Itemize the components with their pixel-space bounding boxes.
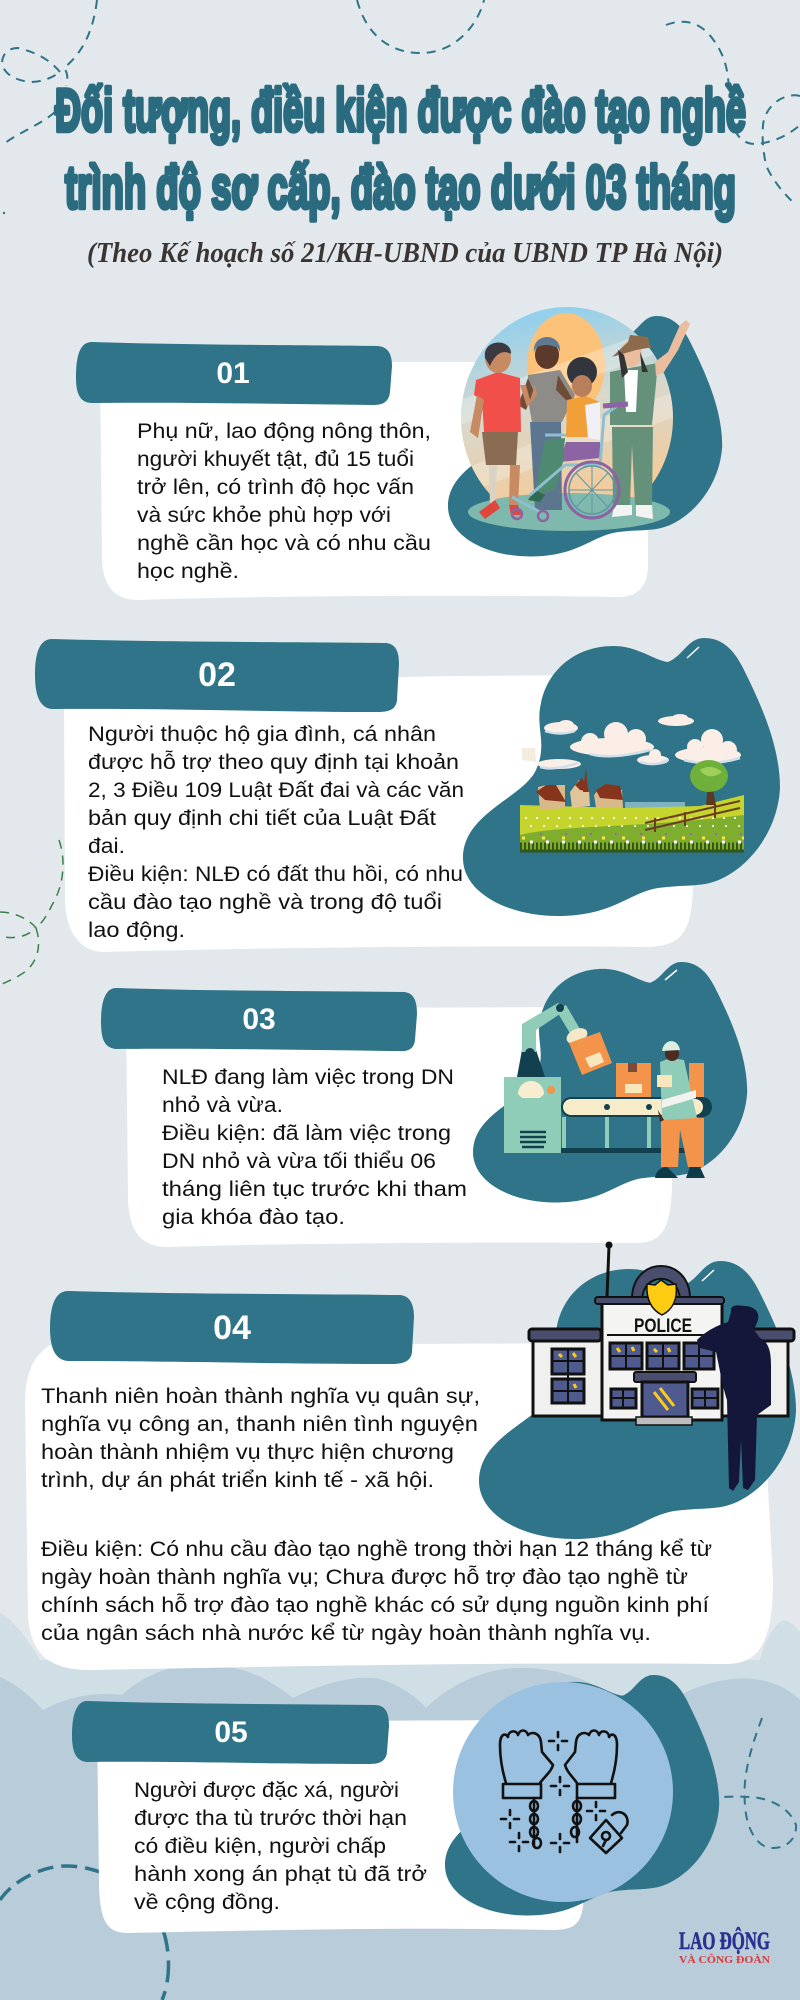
text 02: Điều kiện: NLĐ có đất thu hồi, có nhu [88,863,463,886]
text 04: Điều kiện: Có nhu cầu đào tạo nghề trong thời hạn 12 tháng kể từ [41,1538,712,1561]
text 05: về cộng đồng. [134,1891,280,1914]
text 03: Điều kiện: đã làm việc trong [162,1122,451,1145]
header 03 [101,988,417,1051]
text 05: được tha tù trước thời hạn [134,1807,407,1830]
illustration: police station [529,1242,794,1491]
panel: 03 [101,962,747,1247]
icon: handcuffed hands with lock [500,1730,628,1853]
number 05: 05 [214,1716,248,1749]
text 02: bản quy định chi tiết của Luật Đất [88,807,436,830]
field [625,802,685,809]
card 03 [126,1007,672,1247]
illustration: factory [504,1003,712,1178]
text 01: Phụ nữ, lao động nông thôn, [137,420,431,443]
text 02: cầu đào tạo nghề và trong độ tuổi [88,891,442,914]
title [55,77,746,221]
card 04 [25,1343,773,1670]
header 01 [76,342,392,405]
number 02: 02 [198,656,236,694]
number 03: 03 [242,1003,276,1036]
text 03 [162,1066,467,1229]
clouds [537,714,741,769]
text 04: của ngân sách nhà nước kể từ ngày hoàn thành nghĩa vụ. [41,1622,651,1645]
text 03: gia khóa đào tạo. [162,1206,345,1229]
text 02: đai. [88,835,125,858]
text 01: học nghề. [137,560,239,583]
logo: Lao Động và Công Đoàn: VÀ CÔNG ĐOÀN [679,1953,770,1966]
text 02: 2, 3 Điều 109 Luật Đất đai và các văn [88,779,464,802]
header 04 [50,1291,414,1364]
person in wheelchair [566,396,600,437]
blob 02 [463,638,780,916]
subtitle: (Theo Kế hoạch số 21/KH-UBND của UBND TP Hà Nội) [87,237,723,269]
text 03: nhỏ và vừa. [162,1094,283,1117]
text 03: NLĐ đang làm việc trong DN [162,1066,454,1089]
text 04: nghĩa vụ công an, thanh niên tình nguyện [41,1413,478,1436]
saluting officer [697,1305,771,1491]
text 01: trở lên, có trình độ học vấn [137,476,414,499]
circle [453,1682,673,1902]
blob 05 [445,1675,719,1915]
number 01: 01 [216,357,250,390]
person grey [528,370,575,422]
text 01: và sức khỏe phù hợp với [137,504,391,527]
text 03: tháng liên tục trước khi tham [162,1178,467,1201]
door [634,1372,696,1382]
illustration: countryside [520,714,744,851]
illustration: police station: POLICE [634,1316,692,1337]
text 04: Thanh niên hoàn thành nghĩa vụ quân sự, [41,1385,480,1408]
text 01: người khuyết tật, đủ 15 tuổi [137,448,414,471]
text 01 [137,420,431,583]
number 04: 04 [213,1309,251,1347]
side wings [533,1340,603,1416]
text 03: DN nhỏ và vừa tối thiểu 06 [162,1150,436,1173]
text 05: Người được đặc xá, người [134,1779,399,1802]
text 02: lao động. [88,919,185,942]
panel: 01 [76,307,722,600]
blob 04 [479,1261,796,1539]
text 04: chính sách hỗ trợ đào tạo nghề khác có sử dụng nguồn kinh phí [41,1594,709,1617]
text 01: nghề cần học và có nhu cầu [137,532,431,555]
central block [602,1303,722,1420]
text 04: hoàn thành nhiệm vụ thực hiện chương [41,1441,454,1464]
card 02 [64,675,693,952]
text 05: có điều kiện, người chấp [134,1835,386,1858]
blob 03 [473,962,747,1202]
text 04: trình, dự án phát triển kinh tế - xã hội. [41,1469,434,1492]
illustration: people with disabilities [460,307,690,531]
fence and tree [645,801,740,832]
blob 01 [448,316,722,556]
panel: 02 [35,638,780,952]
header 02 [35,639,399,712]
windows [552,1343,718,1408]
panel: 05 [72,1675,719,1933]
text 02 [88,723,464,942]
person green [612,427,653,505]
header 05 [72,1701,389,1764]
panel: 04 [25,1242,796,1670]
text 05: hành xong án phạt tù đã trở [134,1863,427,1886]
text 05 [134,1779,427,1914]
text 02: Người thuộc hộ gia đình, cá nhân [88,723,436,746]
background hills [0,1613,800,2000]
logo: Lao Động và Công Đoàn [679,1927,770,1966]
card 05 [97,1720,584,1933]
text 04: ngày hoàn thành nghĩa vụ; Chưa được hỗ trợ đào tạo nghề từ [41,1566,688,1589]
card 01 [100,362,648,600]
person red [482,432,518,465]
text 04 [41,1385,712,1645]
houses [538,785,565,810]
text 02: được hỗ trợ theo quy định tại khoản [88,751,459,774]
